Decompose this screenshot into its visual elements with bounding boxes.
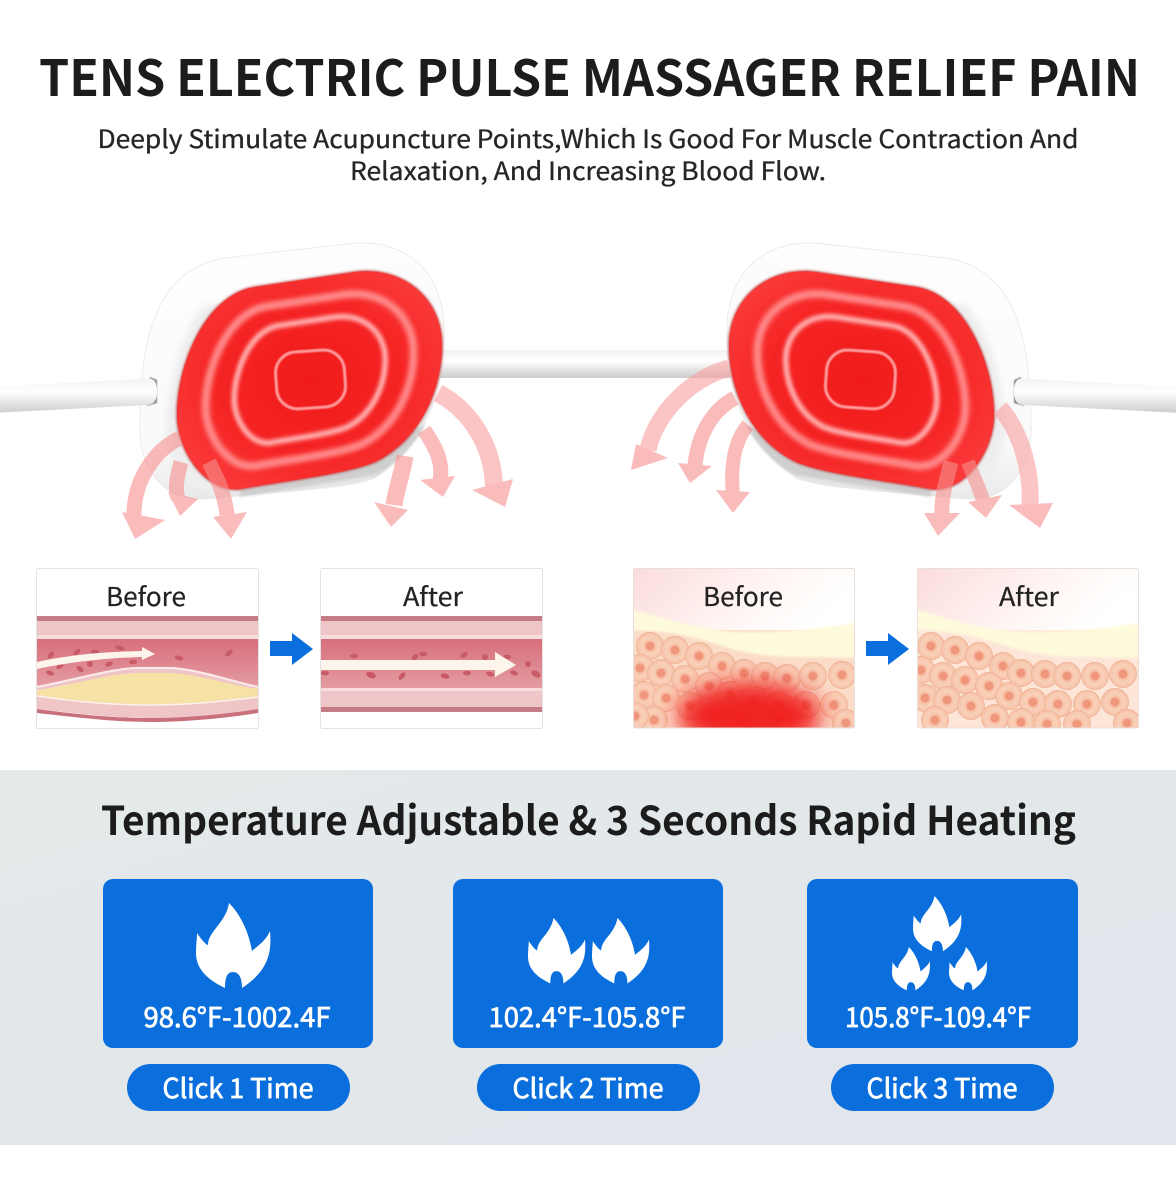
arrow: before to after, vessel — [270, 633, 313, 665]
red cells — [45, 644, 234, 677]
label: After — [999, 577, 1060, 614]
inflamed area — [677, 682, 821, 750]
icon: flame — [196, 903, 270, 988]
temperature: 102.4°F-105.8°F — [488, 996, 686, 1035]
icon: two flames — [528, 918, 649, 983]
card: level 3 — [807, 879, 1078, 1048]
button: click 2 — [477, 1064, 700, 1111]
icon: three flames — [892, 896, 987, 990]
red cells — [321, 651, 542, 681]
button: click 1: Click 1 Time — [162, 1067, 314, 1106]
flow arrow — [37, 647, 155, 669]
temperature: 105.8°F-109.4°F — [845, 996, 1031, 1035]
subtitle: Deeply Stimulate Acupuncture Points,Which Is Good For Muscle Contraction And — [98, 120, 1078, 156]
massager pad: left — [0, 243, 444, 499]
temperature: 98.6°F-1002.4F — [144, 996, 331, 1035]
panel: tissue after — [908, 568, 1140, 738]
panel: tissue before — [633, 568, 855, 728]
section background: heating — [0, 770, 1176, 1145]
heat arrows: right pad — [631, 368, 1053, 536]
label: Before — [106, 577, 186, 614]
subtitle — [98, 120, 1078, 188]
button: click 1 — [127, 1064, 350, 1111]
massager pad: right — [727, 243, 1176, 499]
panel: vessel before — [36, 568, 258, 728]
heat arrows: left pad — [122, 393, 513, 539]
card: level 1 — [103, 879, 373, 1048]
cable: middle — [440, 350, 732, 378]
card: level 2 — [453, 879, 723, 1048]
panel: vessel after — [320, 568, 542, 728]
label: Before — [703, 577, 783, 614]
button: click 2: Click 2 Time — [512, 1067, 664, 1106]
button: click 3 — [831, 1064, 1054, 1111]
label: After — [403, 577, 464, 614]
arrow: before to after, tissue — [866, 633, 909, 665]
heading: heating: Temperature Adjustable & 3 Seconds Rapid Heating — [101, 789, 1076, 847]
button: click 3: Click 3 Time — [866, 1067, 1018, 1106]
title: TENS ELECTRIC PULSE MASSAGER RELIEF PAIN — [39, 39, 1140, 111]
subtitle: Relaxation, And Increasing Blood Flow. — [350, 152, 826, 188]
flow arrow — [321, 652, 516, 677]
